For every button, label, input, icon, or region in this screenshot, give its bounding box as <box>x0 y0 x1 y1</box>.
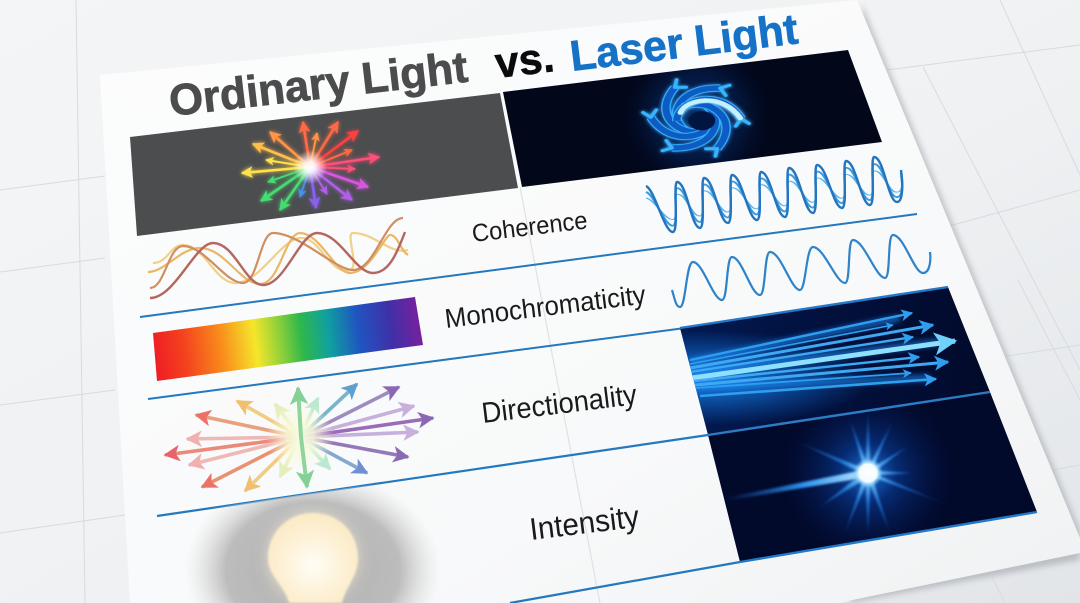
label: Monochromaticity: Monochromaticity <box>443 280 648 334</box>
panel: laser directionality <box>680 286 990 434</box>
icon: glowing light bulb <box>194 484 432 603</box>
divider: row one <box>140 214 917 317</box>
panel: laser light dark header <box>503 50 882 187</box>
panel: ordinary light dark header <box>130 93 518 236</box>
icon: glowing blue swirl <box>642 72 750 164</box>
label: Coherence: Coherence <box>470 206 589 248</box>
arrows: ordinary light scattering <box>165 384 433 491</box>
divider: row two <box>148 328 685 399</box>
divider: row three <box>157 435 708 516</box>
label: Directionality: Directionality <box>480 379 639 430</box>
icon: rainbow arrow starburst <box>242 122 379 210</box>
paper shadow <box>850 4 1080 603</box>
title: Laser Light: Laser Light <box>567 5 801 81</box>
title: Ordinary Light: Ordinary Light <box>167 43 471 126</box>
fold line <box>520 187 600 603</box>
spectrum bar <box>153 297 423 381</box>
wave: ordinary light coherence <box>148 218 408 298</box>
title: vs.: vs. <box>493 33 557 88</box>
icon: laser star flare <box>730 408 940 542</box>
arrows: parallel laser beams <box>690 313 955 396</box>
wave: laser coherence <box>646 157 902 232</box>
label: Intensity: Intensity <box>528 499 642 547</box>
panel: laser intensity <box>708 388 1037 562</box>
divider: row four <box>510 562 740 603</box>
wave: laser monochromatic <box>672 235 930 307</box>
